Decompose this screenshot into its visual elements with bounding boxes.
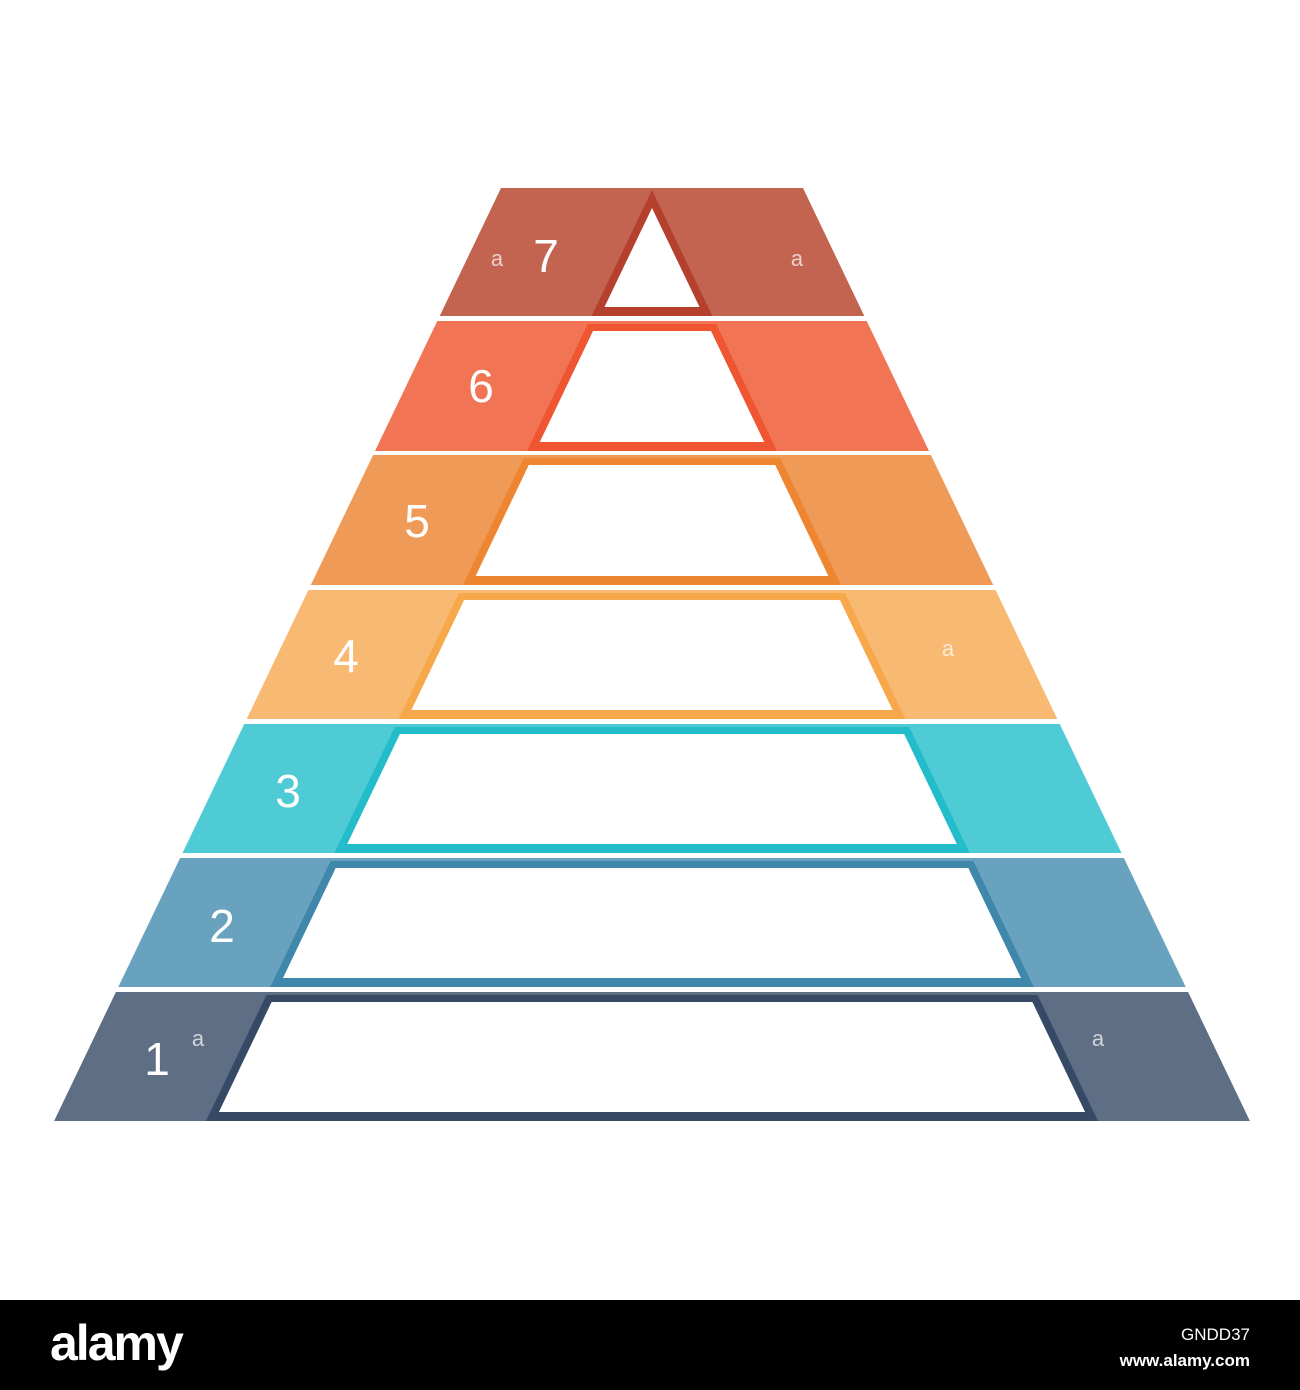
footer bar — [0, 1300, 1300, 1390]
footer image id: www.alamy.com — [1120, 1351, 1250, 1370]
band 6 — [375, 321, 929, 451]
band 4: a — [942, 636, 955, 661]
band 1 — [54, 992, 1250, 1121]
footer image id: GNDD37 — [1181, 1325, 1250, 1344]
band 1: a — [192, 1026, 205, 1051]
band 5 — [311, 455, 993, 585]
band 5: 5 — [404, 495, 430, 547]
band 2 — [118, 858, 1186, 987]
footer logo: alamy — [50, 1315, 182, 1371]
band 1: 1 — [144, 1033, 170, 1085]
band 7: 7 — [533, 230, 559, 282]
band 2: 2 — [209, 900, 235, 952]
band 7 — [440, 188, 864, 316]
band 6: 6 — [468, 360, 494, 412]
band 1: a — [1092, 1026, 1105, 1051]
band 3: 3 — [275, 765, 301, 817]
band 3 — [182, 724, 1122, 853]
footer image id — [1120, 1325, 1250, 1370]
band 4: 4 — [333, 630, 359, 682]
band 7: a — [491, 246, 504, 271]
band 7: a — [791, 246, 804, 271]
band 4 — [247, 590, 1057, 719]
